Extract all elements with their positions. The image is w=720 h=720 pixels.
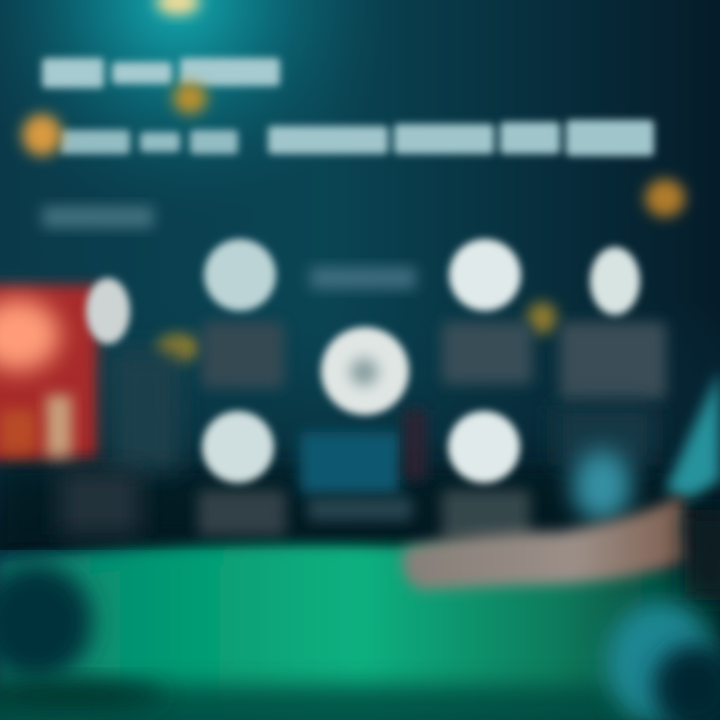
teal sleeve <box>665 370 720 500</box>
top light glow <box>156 0 200 15</box>
center chip icon <box>321 327 409 415</box>
title line two left <box>60 130 238 154</box>
chip center <box>350 358 378 386</box>
dark sphere bottom left <box>0 564 165 709</box>
sphere shadow <box>0 681 165 709</box>
gray panels <box>60 322 666 540</box>
center teal panel <box>300 410 426 521</box>
title line two right <box>268 120 654 156</box>
machine screen glow <box>0 299 60 371</box>
lower dark strip <box>0 465 720 550</box>
teal sphere bottom right <box>606 602 720 720</box>
circle icons <box>86 239 640 483</box>
title line one <box>42 58 280 88</box>
sphere dark core <box>653 644 720 720</box>
gold chip accents <box>22 82 685 362</box>
green felt table <box>0 545 720 720</box>
table lower shade <box>0 685 640 720</box>
center label <box>310 267 416 289</box>
title <box>42 58 654 156</box>
dark sleeve end <box>685 510 720 600</box>
dark red accent <box>404 410 426 480</box>
machine lower glow <box>46 395 72 460</box>
red slot machine <box>0 285 98 460</box>
subtitle <box>42 206 154 228</box>
teal ball behind hand <box>572 450 632 522</box>
hand and arm <box>402 495 690 590</box>
center panel caption <box>308 497 412 521</box>
